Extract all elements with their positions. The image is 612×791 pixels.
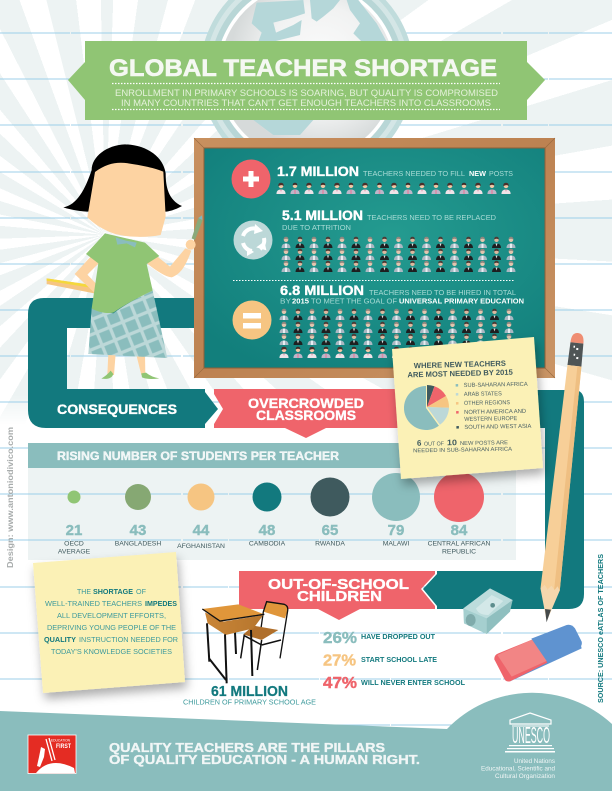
globe [200,0,414,180]
Central African Republic [428,472,490,556]
stat: 6.8 million: TEACHERS NEED TO BE HIRED IN TOTAL [369,288,516,297]
OECD average: 21 [66,522,82,539]
47 percent: 47% [323,675,357,692]
design credit: Design: www.antoniodivico.com [6,427,15,568]
chart panel backdrop [28,468,516,560]
stat: 6.8 million [280,283,524,306]
26 percent: 26% [323,630,357,647]
sticky note: shortage statement: OF [136,589,146,596]
Malawi: MALAWI [383,540,409,548]
sticky note: shortage statement: IMPEDES [145,601,177,608]
27 percent: START SCHOOL LATE [361,657,437,664]
source credit: SOURCE: UNESCO eATLAS OF TEACHERS [596,554,605,703]
out-of-school children banner: OUT-OF-SCHOOL [268,576,409,593]
sticky note: shortage statement: TODAY'S KNOWLEDGE SOCIETIES [51,649,172,656]
Bangladesh: 43 [130,522,146,539]
footer slogan: OF QUALITY EDUCATION - A HUMAN RIGHT. [109,752,420,767]
stat: 1.7 million: NEW [469,169,486,178]
overcrowded classrooms banner [214,389,405,438]
sticky note: shortage statement: ALL DEVELOPMENT EFFORTS, [57,613,166,620]
OECD average: OECD [64,540,84,548]
footer [0,693,612,791]
note caption: 10 [447,438,458,447]
pie legend: SOUTH AND WEST ASIA [464,424,532,431]
overcrowded classrooms banner: CLASSROOMS [256,407,356,423]
pencil [537,332,588,623]
UNESCO caption [481,759,555,780]
icon: eraser [494,625,582,681]
out-of-school statistics [323,630,466,692]
footer slogan: QUALITY TEACHERS ARE THE PILLARS [109,740,385,755]
pie legend: WESTERN EUROPE [464,416,517,423]
out-of-school children banner [239,571,435,620]
Afghanistan: 44 [193,522,210,539]
teal frame: right side [400,390,584,609]
stat: 5.1 million: TEACHERS NEED TO BE REPLACED [367,213,497,222]
UNESCO caption: Educational, Scientific and [481,766,555,772]
out-of-school children banner: CHILDREN [297,588,382,605]
Malawi: 79 [388,522,404,539]
background sunburst rays [0,0,612,440]
stat: 1.7 million [277,164,513,179]
teal frame: consequences bar [28,298,218,428]
title: GLOBAL TEACHER SHORTAGE [109,55,497,82]
note heading: WHERE NEW TEACHERS [414,359,506,370]
subtitle [115,88,499,108]
26 percent: HAVE DROPPED OUT [361,634,436,641]
Cambodia: 48 [259,522,275,539]
61 million stat: 61 MILLION [211,684,288,700]
logo: Education First [28,735,76,774]
subtitle: IN MANY COUNTRIES THAT CAN'T GET ENOUGH TEACHERS INTO CLASSROOMS [121,98,491,108]
47 percent [323,675,466,692]
people row: new posts [276,183,511,194]
stat: 1.7 million: TEACHERS NEEDED TO FILL [363,169,465,178]
teacher's hand and chalk pencil [186,215,203,250]
UNESCO caption: Cultural Organization [495,774,555,780]
pie legend: NORTH AMERICA AND [464,409,526,416]
pie legend: OTHER REGIONS [464,400,510,407]
icon: equals [232,300,272,340]
Bangladesh: BANGLADESH [115,540,161,548]
Rwanda [310,478,350,548]
icon: sharpener [463,588,513,634]
stat: 5.1 million: 5.1 MILLION [282,208,363,223]
sticky note: where new teachers [392,337,543,479]
sticky note: shortage statement: SHORTAGE [93,589,133,596]
stat: 6.8 million: 2015 [292,296,309,306]
Rwanda: 65 [322,522,338,539]
47 percent: WILL NEVER ENTER SCHOOL [361,680,466,687]
UNESCO caption: United Nations [514,759,555,765]
pie legend [456,382,532,431]
teacher illustration [47,144,191,379]
stat: 6.8 million: BY [280,296,291,306]
Central African Republic: CENTRAL AFRICAN [428,540,490,548]
sticky note: shortage statement: WELL-TRAINED TEACHERS [45,601,142,608]
stat: 5.1 million [282,208,497,232]
desk and chair [202,602,288,683]
Afghanistan [177,484,225,550]
Central African Republic: REPUBLIC [442,548,476,556]
sticky note: shortage statement: DEPRIVING YOUNG PEOPLE OF THE [47,625,176,632]
rising number heading [28,443,516,468]
Malawi [372,473,420,548]
icon: plus [232,160,270,198]
note caption: 6 [417,439,422,448]
26 percent [323,630,436,647]
logo: UNESCO temple: UNESCO [512,721,550,748]
logo: Education First: EDUCATION [51,738,71,742]
Cambodia [249,482,286,548]
overcrowded classrooms banner: OVERCROWDED [248,395,364,411]
pie chart [404,385,449,430]
stat: 6.8 million: UNIVERSAL PRIMARY EDUCATION [399,296,524,306]
sticky note: shortage statement: THE [77,589,91,596]
rising number heading: RISING NUMBER OF STUDENTS PER TEACHER [57,449,339,463]
logo: UNESCO temple [505,713,555,752]
stat: 6.8 million: 6.8 MILLION [280,283,364,298]
61 million stat: CHILDREN OF PRIMARY SCHOOL AGE [183,700,316,706]
27 percent [323,652,437,670]
Bangladesh [115,484,161,548]
note caption: NEEDED IN SUB-SAHARAN AFRICA [413,447,512,454]
chalkboard [194,138,555,378]
note caption: OUT OF [424,441,445,448]
stat: 5.1 million: DUE TO ATTRITION [282,223,351,232]
sticky note: shortage statement: INSTRUCTION NEEDED FOR [79,637,178,644]
pie legend: ARAB STATES [464,391,502,398]
sticky note: shortage statement: QUALITY [44,637,76,644]
icon: recycle arrows [234,220,272,260]
note heading [407,359,514,379]
61 million stat [183,684,316,706]
bubble chart: students per teacher [58,472,490,556]
stat: 1.7 million: POSTS [489,169,513,178]
footer slogan [109,740,420,767]
Cambodia: CAMBODIA [249,540,286,548]
title banner [68,41,545,120]
subtitle: ENROLLMENT IN PRIMARY SCHOOLS IS SOARING, BUT QUALITY IS COMPROMISED [115,88,499,98]
consequences label: CONSEQUENCES [57,401,177,417]
note caption [413,437,512,454]
note caption: NEW POSTS ARE [460,440,508,447]
27 percent: 27% [323,652,356,670]
Afghanistan: AFGHANISTAN [177,543,225,550]
OECD average [58,490,91,556]
people grid: total [279,309,514,358]
sticky note: shortage statement [33,552,185,693]
pie legend: SUB-SAHARAN AFRICA [464,382,528,389]
OECD average: AVERAGE [58,548,91,556]
note heading: ARE MOST NEEDED BY 2015 [407,368,514,379]
Central African Republic: 84 [451,522,468,539]
Rwanda: RWANDA [315,540,345,548]
stat: 6.8 million: TO MEET THE GOAL OF [311,296,397,306]
logo: Education First: FIRST [56,744,71,750]
stat: 1.7 million: 1.7 MILLION [277,164,359,179]
people grid: replaced [282,237,516,272]
